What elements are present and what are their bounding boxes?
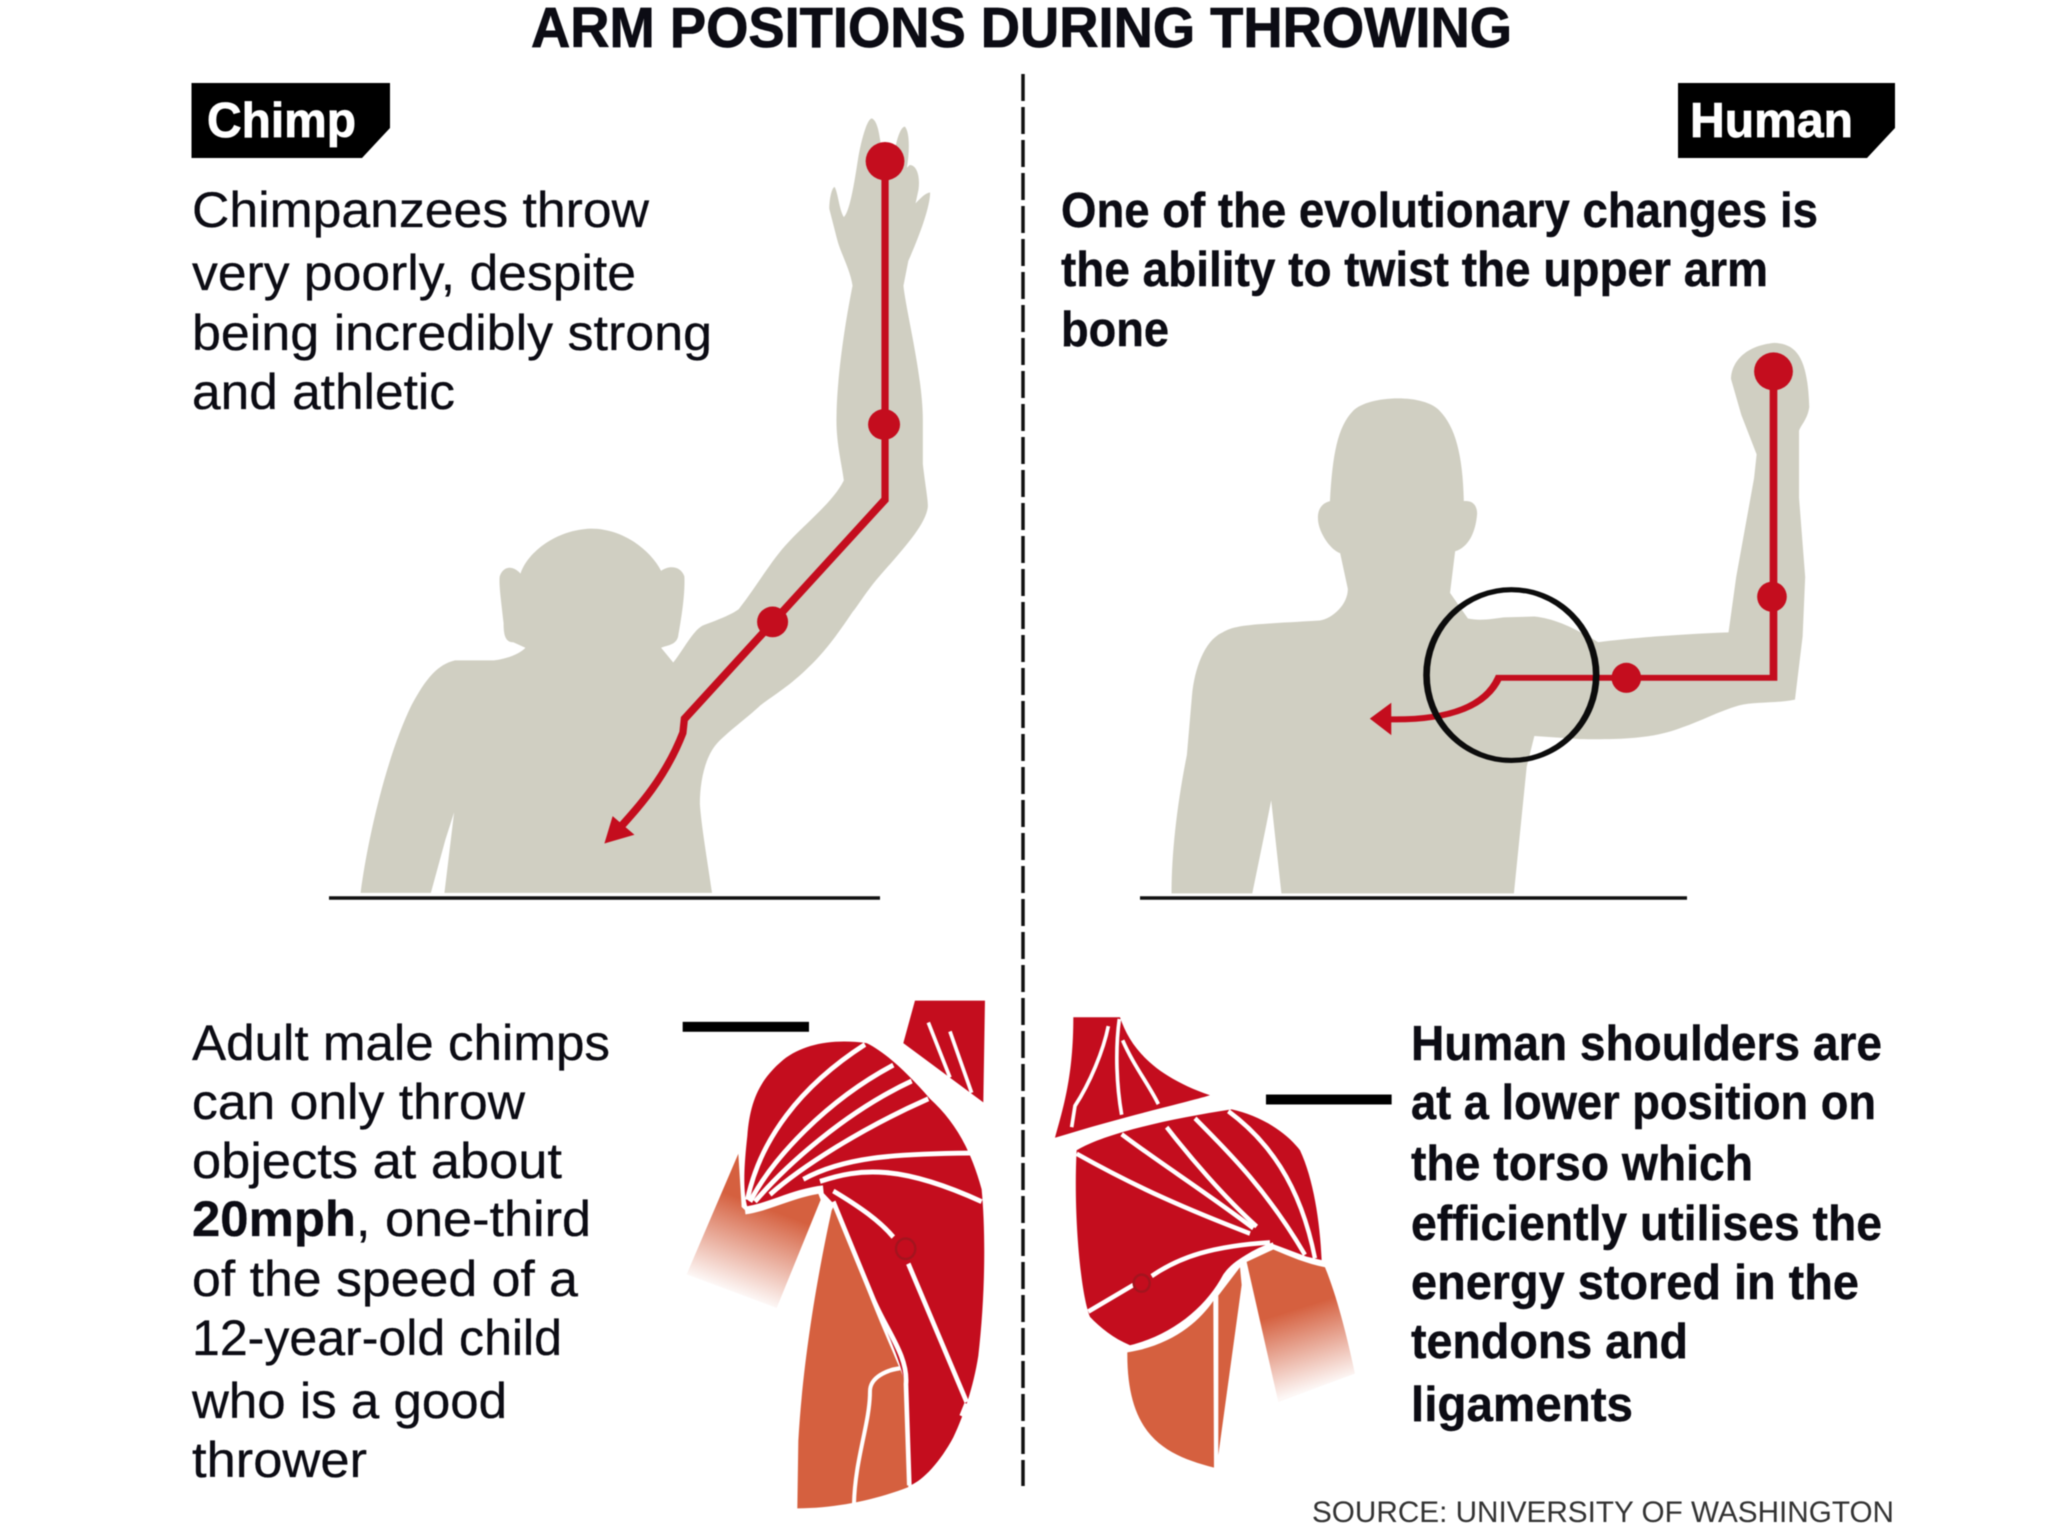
chimp silhouette [361, 118, 930, 893]
neck muscle patch [903, 1001, 985, 1102]
muscle fibre lines [1077, 1111, 1315, 1349]
text block: chimp speed: who is a good [191, 1373, 507, 1429]
text block: human shoulders: energy stored in the [1411, 1256, 1859, 1310]
arm line and arrow [1370, 352, 1793, 735]
chimp baseline [329, 896, 880, 900]
text block: human shoulders: tendons and [1411, 1315, 1688, 1369]
tag: Human: Human [1690, 94, 1853, 148]
tag: Chimp: Chimp [207, 94, 356, 148]
arm line and arrow [604, 142, 904, 844]
text block: chimp speed: of the speed of a [192, 1251, 578, 1307]
joint dot [1134, 1275, 1150, 1292]
text block: chimp speed: , one-third [356, 1191, 591, 1247]
figure: chimp shoulder muscles [683, 1001, 985, 1508]
human silhouette [1172, 343, 1809, 893]
text block: human shoulders: the torso which [1411, 1137, 1753, 1191]
figure: chimp silhouette with arm line [361, 118, 930, 893]
joint dot [896, 1239, 915, 1259]
text block: human intro: bone [1061, 303, 1169, 357]
text block: human shoulders [1411, 1017, 1882, 1432]
human baseline [1140, 896, 1687, 900]
text block: chimp speed: Adult male chimps [192, 1015, 610, 1071]
pointer bar [1266, 1095, 1392, 1104]
figure: human shoulder muscles [1055, 1017, 1392, 1468]
text block: human intro [1061, 184, 1818, 357]
centre dashed divider [1021, 74, 1025, 1486]
lower orange muscle [1127, 1267, 1242, 1468]
text block: chimp intro [192, 182, 712, 420]
text block: chimp intro: Chimpanzees throw [192, 182, 650, 238]
source note: SOURCE: UNIVERSITY OF WASHINGTON [1312, 1496, 1894, 1529]
main red shoulder muscle [744, 1042, 984, 1485]
pointer bar [683, 1022, 809, 1032]
text block: human shoulders: ligaments [1411, 1378, 1633, 1432]
figure: human silhouette with arm line [1172, 343, 1809, 893]
tag: Chimp [192, 83, 390, 158]
neck muscle patch [1055, 1017, 1210, 1138]
shoulder highlight circle [1427, 590, 1596, 760]
main red shoulder muscle [1076, 1109, 1322, 1345]
text block: chimp speed: can only throw [192, 1074, 526, 1130]
lower orange muscle [797, 1207, 908, 1508]
text block: human shoulders: at a lower position on [1411, 1076, 1876, 1130]
text block: chimp intro: being incredibly strong [192, 305, 712, 361]
text block: chimp intro: very poorly, despite [192, 245, 636, 301]
faded upper arm [687, 1154, 821, 1308]
faded upper arm [1247, 1249, 1355, 1402]
text block: chimp speed: thrower [192, 1432, 367, 1488]
muscle fibre lines [745, 1045, 982, 1485]
text block: human intro: One of the evolutionary changes is [1061, 184, 1818, 238]
text block: human intro: the ability to twist the upper arm [1061, 243, 1768, 297]
text block: chimp speed: 20mph [192, 1191, 356, 1247]
text block: chimp speed [191, 1015, 610, 1488]
text block: chimp speed: 12-year-old child [192, 1310, 562, 1366]
tag: Human [1678, 83, 1895, 158]
text block: chimp speed: objects at about [192, 1133, 562, 1189]
text block: chimp intro: and athletic [192, 364, 455, 420]
text block: human shoulders: efficiently utilises the [1411, 1197, 1882, 1251]
text block: human shoulders: Human shoulders are [1411, 1017, 1882, 1071]
